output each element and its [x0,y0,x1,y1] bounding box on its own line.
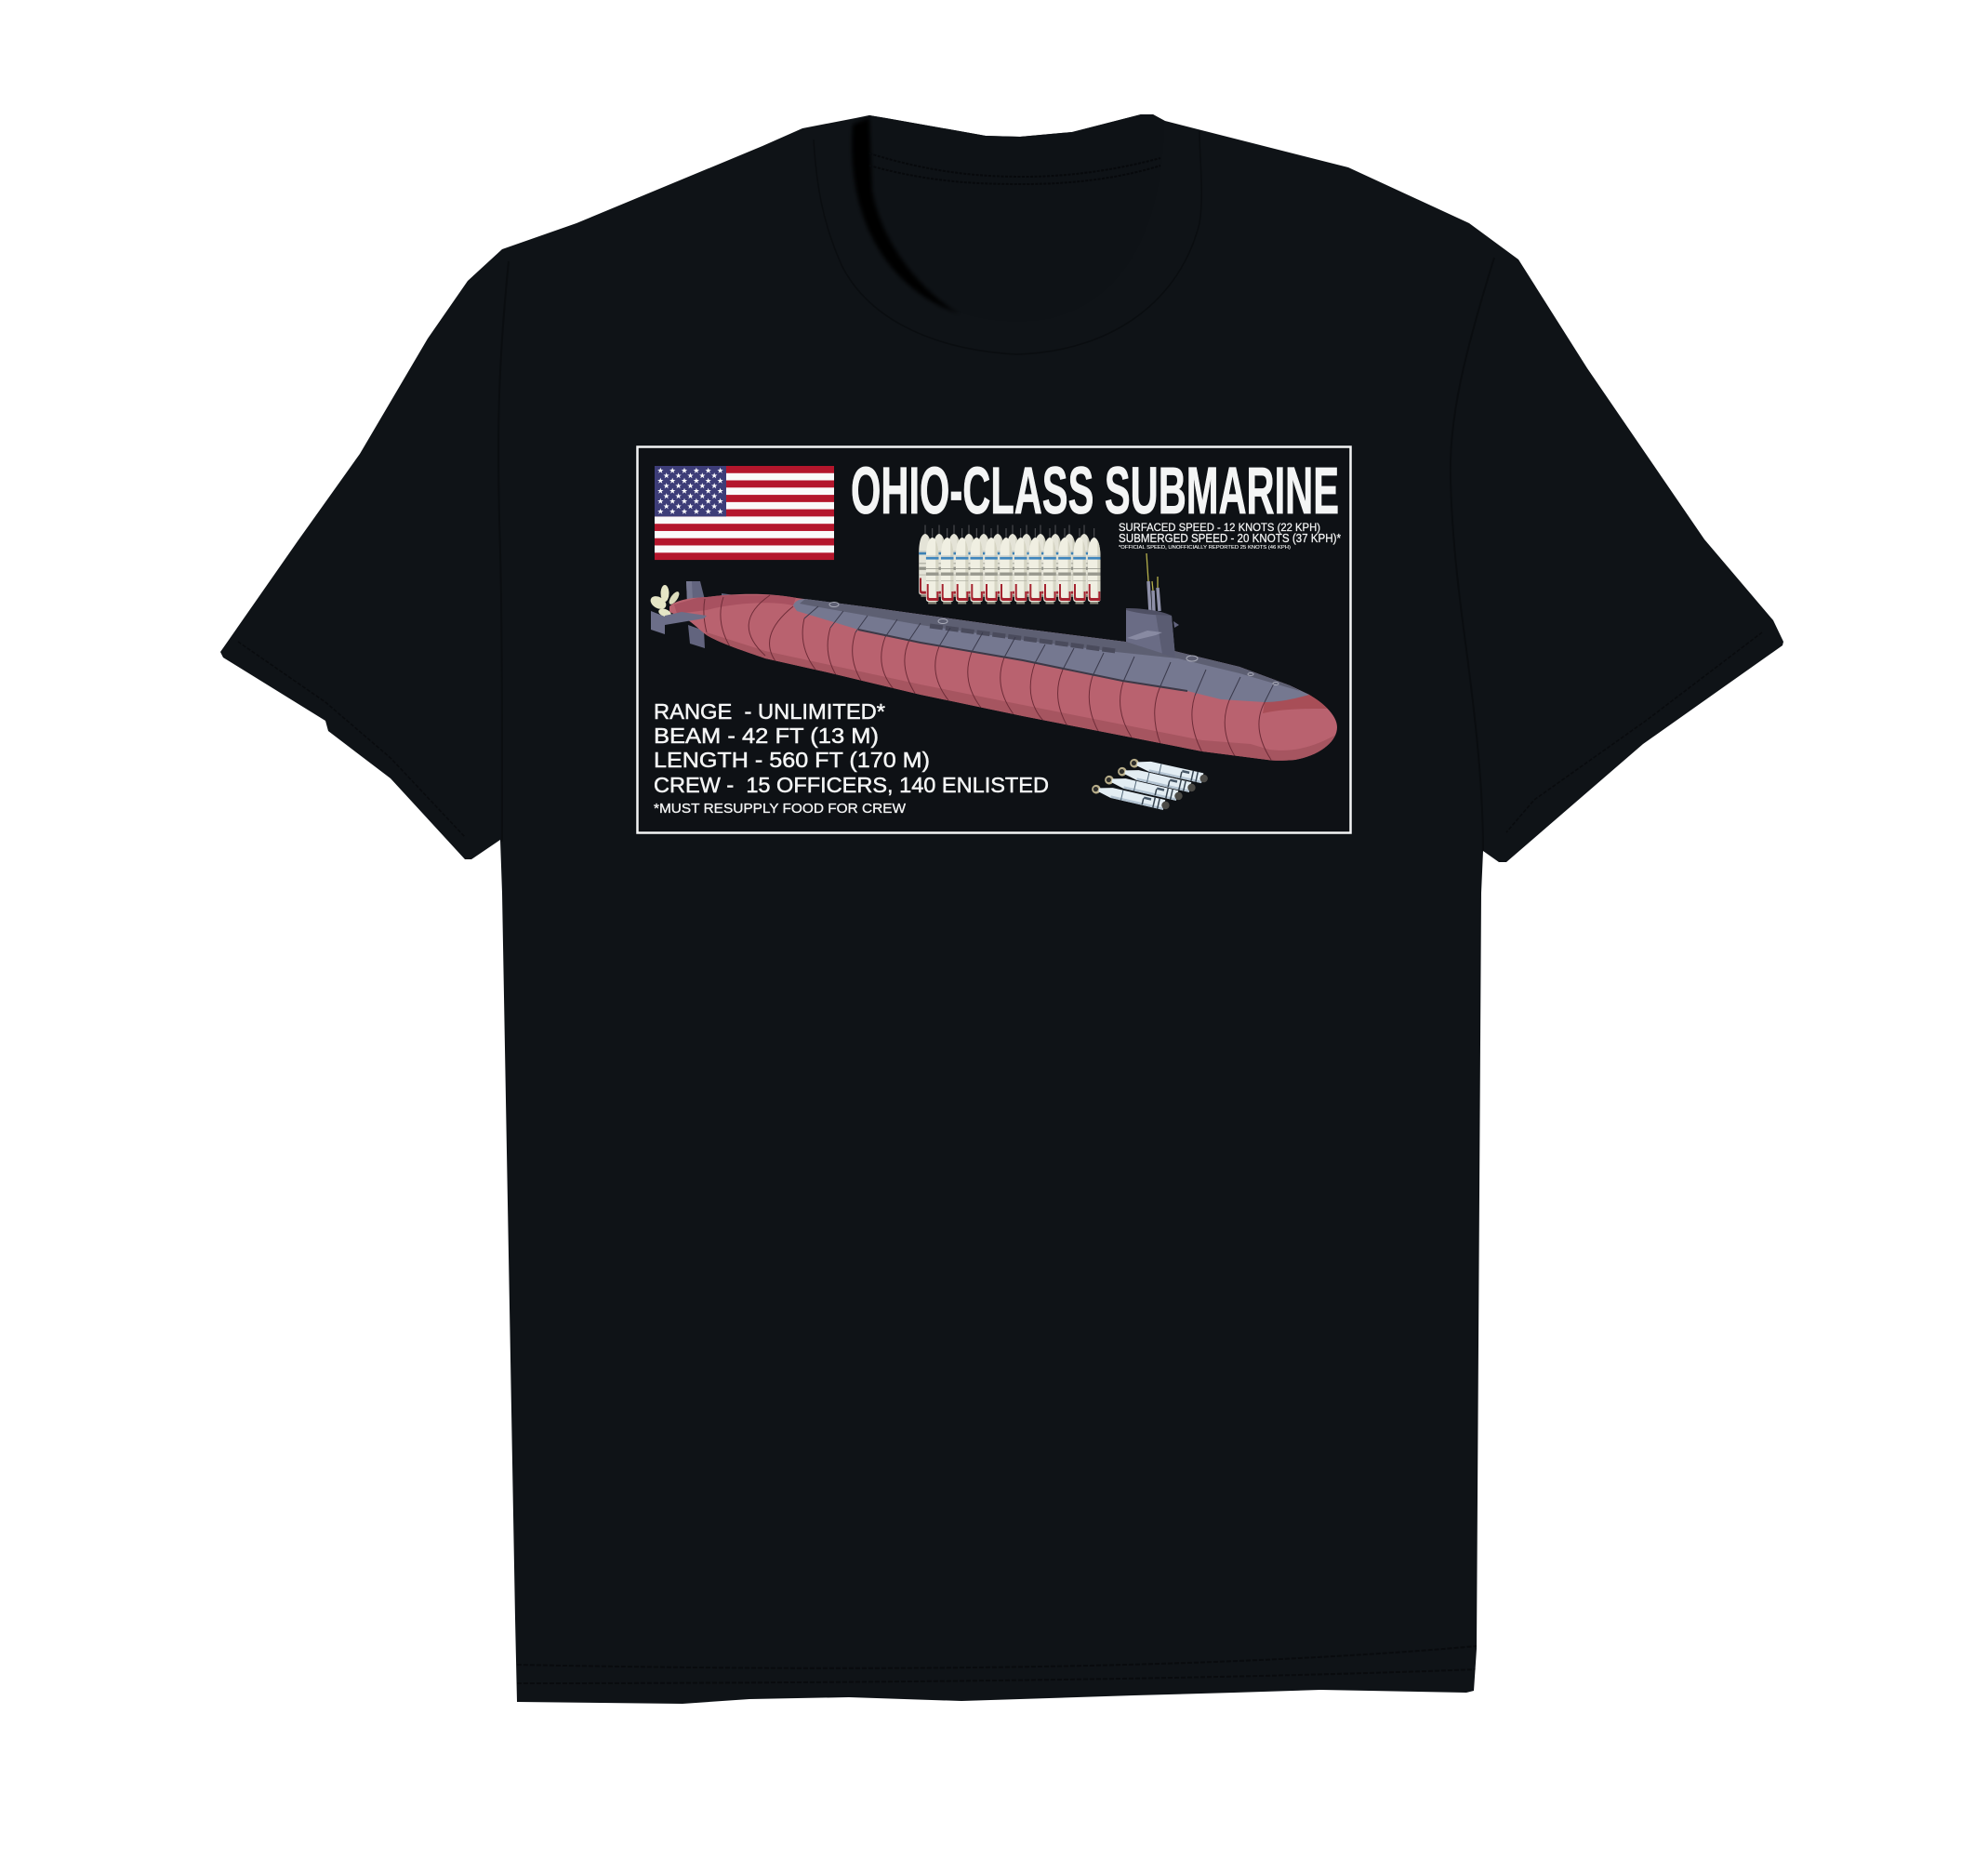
submarine [648,553,1339,772]
vessel statistics: LENGTH - 560 FT (170 M) [654,748,930,772]
sail and masts [1126,553,1179,658]
graphic panel [638,446,1350,833]
stern rudders and propeller [648,581,735,648]
collar [814,114,1201,354]
vessel statistics [654,699,1049,817]
vessel statistics: RANGE - UNLIMITED* [654,699,885,724]
speed specifications: SUBMERGED SPEED - 20 KNOTS (37 KPH)* [1119,532,1341,545]
speed specifications: SURFACED SPEED - 12 KNOTS (22 KPH) [1119,521,1320,534]
torpedoes [1091,757,1209,811]
ballistic missile row [919,525,1100,604]
stern plane [651,611,707,634]
speed specifications [1119,521,1341,551]
panel frame [638,446,1350,833]
t-shirt [220,114,1783,1704]
vessel statistics: CREW - 15 OFFICERS, 140 ENLISTED [654,773,1049,797]
speed specifications: *OFFICIAL SPEED, UNOFFICIALLY REPORTED 25 KNOTS (46 KPH) [1119,545,1291,551]
icon: US flag [655,466,834,560]
pressure hull [651,594,1339,772]
missile deck [793,599,1309,702]
vessel statistics: *MUST RESUPPLY FOOD FOR CREW [654,801,907,817]
vessel statistics: BEAM - 42 FT (13 M) [654,724,879,748]
title: OHIO-CLASS SUBMARINE [851,455,1339,528]
